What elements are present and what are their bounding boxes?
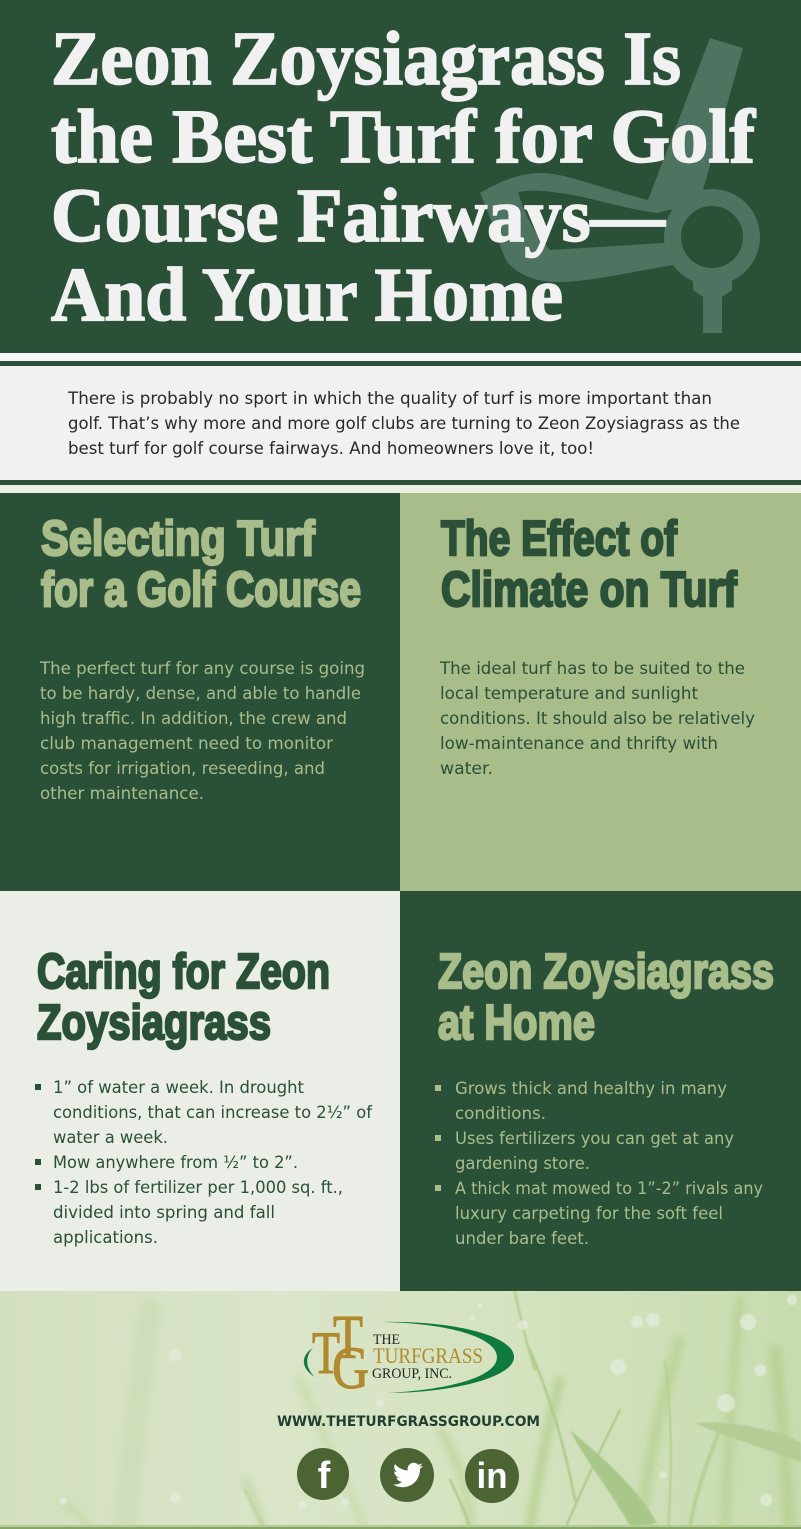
intro text xyxy=(67,389,740,459)
list: at home: gardening store. xyxy=(455,1154,590,1174)
logo: the turfgrass group: G xyxy=(332,1335,369,1401)
list: at home: Uses fertilizers you can get at any xyxy=(455,1129,734,1149)
panel: caring for zeon zoysiagrass xyxy=(0,891,400,1291)
list: caring: divided into spring and fall xyxy=(53,1203,275,1223)
list: caring: water a week. xyxy=(53,1128,168,1148)
heading: selecting turf xyxy=(41,512,361,617)
text: effect of climate: low-maintenance and thrifty with xyxy=(440,734,718,754)
website url: WWW.THETURFGRASSGROUP.COM xyxy=(277,1414,540,1430)
list: caring: Mow anywhere from ½” to 2”. xyxy=(53,1153,298,1173)
panel: selecting turf xyxy=(0,493,400,891)
icon: twitter xyxy=(380,1448,434,1502)
heading: caring: Zoysiagrass xyxy=(37,996,271,1050)
heading: at home: at Home xyxy=(438,996,595,1050)
logo: the turfgrass group: THE xyxy=(373,1332,400,1348)
list: caring xyxy=(35,1078,373,1248)
list: at home: A thick mat mowed to 1”-2” rivals any xyxy=(455,1179,763,1199)
text: effect of climate: The ideal turf has to be suited to the xyxy=(439,659,745,679)
text: selecting turf: club management need to monitor xyxy=(40,734,334,754)
text: effect of climate: water. xyxy=(440,759,493,779)
icon: linkedin: in xyxy=(476,1455,508,1496)
title: the Best Turf for Golf xyxy=(51,95,757,179)
icon: linkedin xyxy=(465,1449,519,1503)
logo: the turfgrass group: TURFGRASS xyxy=(373,1343,483,1368)
text: selecting turf: other maintenance. xyxy=(40,784,204,804)
list: at home: conditions. xyxy=(455,1104,546,1124)
text: selecting turf xyxy=(39,659,365,804)
list: caring: 1-2 lbs of fertilizer per 1,000 sq. ft., xyxy=(53,1178,343,1198)
heading: effect of climate xyxy=(441,512,738,617)
text: effect of climate: local temperature and sunlight xyxy=(440,684,698,704)
heading: caring: Caring for Zeon xyxy=(37,945,330,999)
panel: footer xyxy=(0,1291,801,1529)
icon: facebook: f xyxy=(318,1455,331,1497)
panel: header xyxy=(0,0,801,353)
logo: the turfgrass group: T xyxy=(333,1304,363,1372)
title: Course Fairways— xyxy=(51,174,666,258)
heading: caring xyxy=(37,945,330,1050)
text: selecting turf: costs for irrigation, reseeding, and xyxy=(40,759,325,779)
text: selecting turf: high traffic. In addition, the crew and xyxy=(40,709,347,729)
list: at home: under bare feet. xyxy=(455,1229,589,1249)
intro text: There is probably no sport in which the quality of turf is more important than xyxy=(67,389,712,409)
list: at home xyxy=(435,1079,763,1249)
panel: zeon zoysiagrass at home xyxy=(400,891,801,1291)
intro text: golf. That’s why more and more golf clubs are turning to Zeon Zoysiagrass as the xyxy=(68,414,740,434)
logo: the turfgrass group: GROUP, INC. xyxy=(372,1366,452,1382)
heading: effect of climate: Climate on Turf xyxy=(441,563,738,617)
logo: the turfgrass group: T xyxy=(312,1320,340,1386)
panel: intro xyxy=(0,353,801,493)
title: Zeon Zoysiagrass Is xyxy=(51,17,681,101)
heading: selecting turf: Selecting Turf xyxy=(41,512,316,566)
list: at home: luxury carpeting for the soft feel xyxy=(455,1204,723,1224)
list: caring: conditions, that can increase to 2½” of xyxy=(53,1103,373,1123)
text: selecting turf: The perfect turf for any course is going xyxy=(39,659,365,679)
panel: effect of climate xyxy=(400,493,801,891)
heading: at home xyxy=(438,945,774,1050)
list: caring: 1” of water a week. In drought xyxy=(53,1078,304,1098)
icon: golf club and ball xyxy=(480,38,752,333)
heading: effect of climate: The Effect of xyxy=(441,512,678,566)
logo: the turfgrass group xyxy=(304,1304,514,1401)
icon: facebook xyxy=(297,1448,349,1500)
text: selecting turf: to be hardy, dense, and able to handle xyxy=(40,684,361,704)
text: effect of climate: conditions. It should also be relatively xyxy=(440,709,755,729)
title xyxy=(51,17,757,337)
text: effect of climate xyxy=(439,659,755,779)
intro text: best turf for golf course fairways. And homeowners love it, too! xyxy=(68,439,594,459)
title: And Your Home xyxy=(51,253,563,337)
list: at home: Grows thick and healthy in many xyxy=(455,1079,727,1099)
list: caring: applications. xyxy=(53,1228,158,1248)
heading: selecting turf: for a Golf Course xyxy=(41,563,361,617)
grass background xyxy=(59,1292,801,1529)
